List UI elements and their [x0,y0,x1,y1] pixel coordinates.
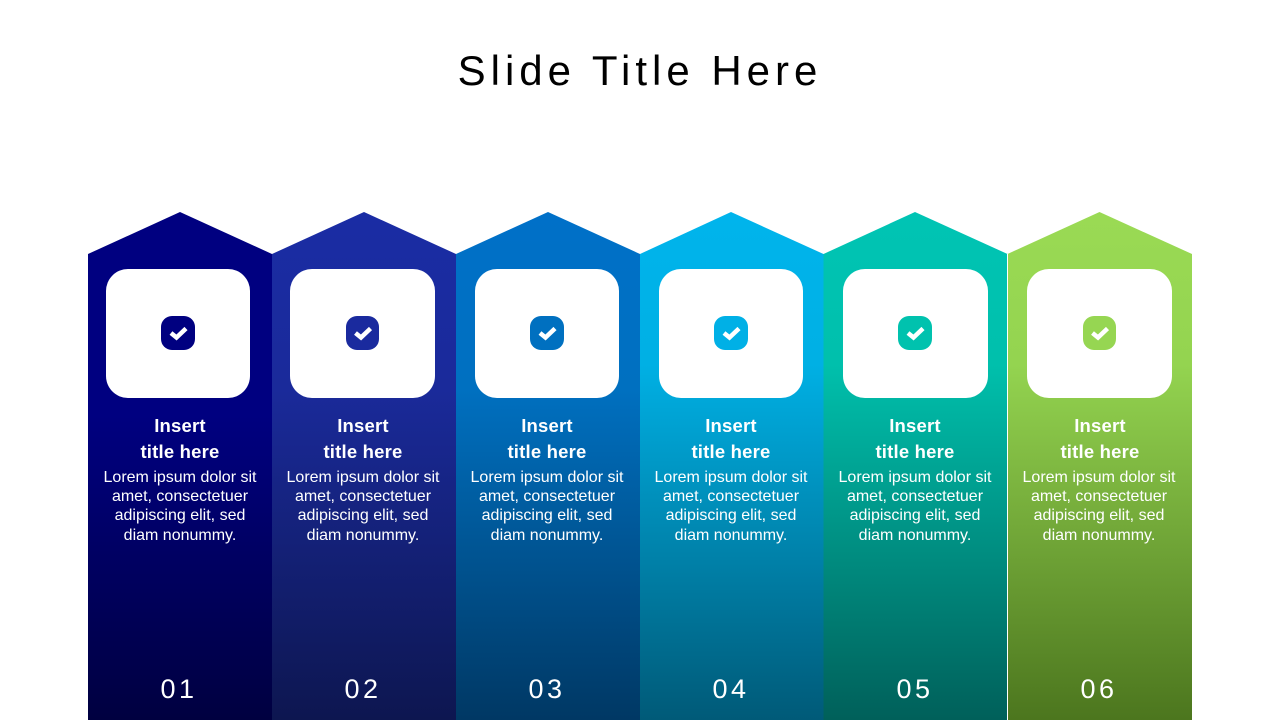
icon card 02 [290,269,435,398]
icon card 01 [106,269,250,398]
number 01: 01 [160,674,198,704]
icon: check badge 04 [714,316,748,350]
body text 03: amet, consectetuer [479,488,616,505]
body text 05: amet, consectetuer [847,488,984,505]
heading 01: Insert [154,415,206,436]
icon: check badge 03 [530,316,564,350]
body text 04: diam nonummy. [675,527,787,544]
body text 02: Lorem ipsum dolor sit [287,469,439,486]
divider between panels 05 and 06 [1006,254,1008,720]
icon card 03 [475,269,619,398]
heading 06: title here [1060,441,1140,462]
title: Slide Title Here [458,47,822,94]
heading 03: Insert [521,415,573,436]
body text 06: adipiscing elit, sed [1034,507,1164,524]
number 02: 02 [344,674,382,704]
body text 04: adipiscing elit, sed [666,507,796,524]
icon card 06 [1027,269,1172,398]
body text 03: adipiscing elit, sed [482,507,612,524]
heading 02: Insert [337,415,389,436]
heading 04: Insert [705,415,757,436]
body text 01: Lorem ipsum dolor sit [104,469,256,486]
panel: step 06 [1008,212,1192,720]
heading 02: title here [323,441,403,462]
body text 05: Lorem ipsum dolor sit [839,469,991,486]
panel: step 01 [88,212,272,720]
heading 05: title here [875,441,955,462]
body text 06: diam nonummy. [1043,527,1155,544]
number 05: 05 [896,674,934,704]
icon: check badge 06 [1083,316,1116,350]
arrow shape 04 [640,212,824,720]
heading 06: Insert [1074,415,1126,436]
icon card 05 [843,269,988,398]
body text 06: Lorem ipsum dolor sit [1023,469,1175,486]
arrow shape 06 [1008,212,1192,720]
arrow shape 03 [456,212,640,720]
body text 01: diam nonummy. [124,527,236,544]
body text 02: amet, consectetuer [295,488,432,505]
heading 04: title here [691,441,771,462]
icon: check badge 02 [346,316,379,350]
body text 01: adipiscing elit, sed [115,507,245,524]
panel: step 04 [640,212,824,720]
number 04: 04 [712,674,750,704]
body text 03: Lorem ipsum dolor sit [471,469,623,486]
icon card 04 [659,269,803,398]
icon: check badge 05 [898,316,932,350]
number 03: 03 [528,674,566,704]
panel: step 05 [824,212,1008,720]
body text 04: Lorem ipsum dolor sit [655,469,807,486]
body text 01: amet, consectetuer [112,488,249,505]
number 06: 06 [1080,674,1118,704]
arrow shape 05 [824,212,1008,720]
heading 01: title here [140,441,220,462]
arrow shape 02 [272,212,456,720]
body text 02: diam nonummy. [307,527,419,544]
icon: check badge 01 [161,316,195,350]
body text 02: adipiscing elit, sed [298,507,428,524]
body text 03: diam nonummy. [491,527,603,544]
body text 05: adipiscing elit, sed [850,507,980,524]
heading 03: title here [507,441,587,462]
body text 05: diam nonummy. [859,527,971,544]
body text 04: amet, consectetuer [663,488,800,505]
panel: step 03 [456,212,640,720]
panel: step 02 [272,212,456,720]
arrow shape 01 [88,212,272,720]
heading 05: Insert [889,415,941,436]
body text 06: amet, consectetuer [1031,488,1168,505]
